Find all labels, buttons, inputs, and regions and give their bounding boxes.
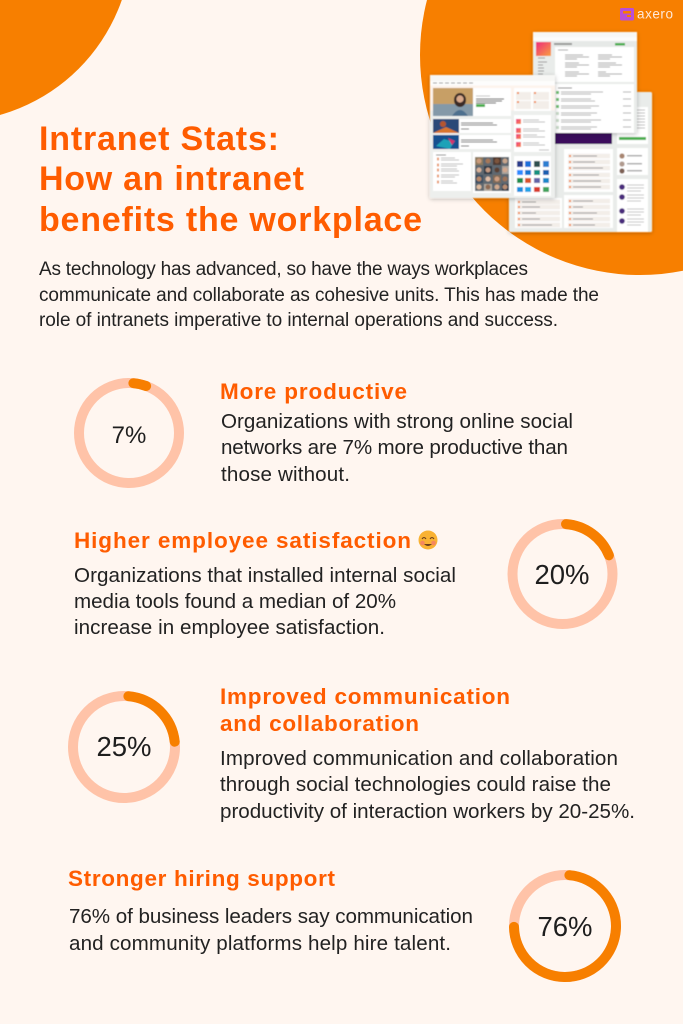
section: more productive: More productive: [220, 379, 407, 404]
section: higher employee satisfaction: Organizations that installed internal social: [74, 564, 456, 587]
section: stronger hiring support: and community platforms help hire talent.: [69, 932, 451, 955]
section: improved communication and collaboration: [220, 684, 635, 823]
decorative orange circle: top left: [0, 0, 132, 122]
icon: smiling emoji: [418, 530, 438, 550]
title: How an intranet: [39, 160, 304, 198]
section: more productive: networks are 7% more productive than: [221, 436, 568, 459]
screenshot: top window: [533, 32, 637, 133]
section: more productive: those without.: [221, 463, 350, 486]
donut chart: 76%: 76%: [537, 911, 593, 942]
section: higher employee satisfaction: Higher employee satisfaction: [74, 528, 411, 553]
donut chart: 20%: 20%: [534, 559, 590, 590]
section: improved communication and collaboration: Improved communication and collaboration: [220, 747, 618, 770]
section: improved communication and collaboration: productivity of interaction workers by 20-25%.: [220, 800, 635, 823]
logo: axero: axero: [637, 6, 673, 22]
section: more productive: Organizations with strong online social: [221, 410, 573, 433]
intro paragraph: [39, 259, 599, 331]
section: higher employee satisfaction: media tools found a median of 20%: [74, 590, 396, 613]
section: higher employee satisfaction: increase in employee satisfaction.: [74, 616, 385, 639]
photo: woman at laptop: [433, 88, 473, 116]
donut chart: 7%: [79, 383, 179, 483]
decorative orange circle: top right: [420, 0, 683, 275]
section: stronger hiring support: 76% of business leaders say communication: [69, 905, 473, 928]
section: higher employee satisfaction: [74, 528, 456, 639]
logo: axero: [620, 6, 673, 22]
product screenshots collage: [430, 32, 652, 232]
title: Intranet Stats:: [39, 120, 279, 158]
screenshot: front window: [430, 75, 555, 198]
screenshot: back window: [509, 92, 652, 232]
donut chart: 25%: 25%: [96, 731, 152, 762]
title: benefits the workplace: [39, 201, 422, 239]
donut chart: 7%: 7%: [112, 422, 146, 449]
title: [39, 120, 422, 239]
section: more productive: [220, 379, 573, 486]
section: stronger hiring support: [68, 866, 473, 955]
donut chart: 25%: [73, 696, 175, 798]
section: improved communication and collaboration: and collaboration: [220, 711, 419, 736]
section: improved communication and collaboration: Improved communication: [220, 684, 510, 709]
photo grid: employee faces: [475, 157, 509, 191]
intro paragraph: As technology has advanced, so have the ways workplaces: [39, 259, 528, 280]
donut chart: 20%: [512, 524, 612, 624]
intro paragraph: communicate and collaborate as cohesive units. This has made the: [39, 285, 599, 306]
section: stronger hiring support: Stronger hiring support: [68, 866, 336, 891]
section: improved communication and collaboration: through social technologies could raise the: [220, 773, 611, 796]
intro paragraph: role of intranets imperative to internal operations and success.: [39, 310, 558, 331]
donut chart: 76%: [514, 875, 616, 977]
